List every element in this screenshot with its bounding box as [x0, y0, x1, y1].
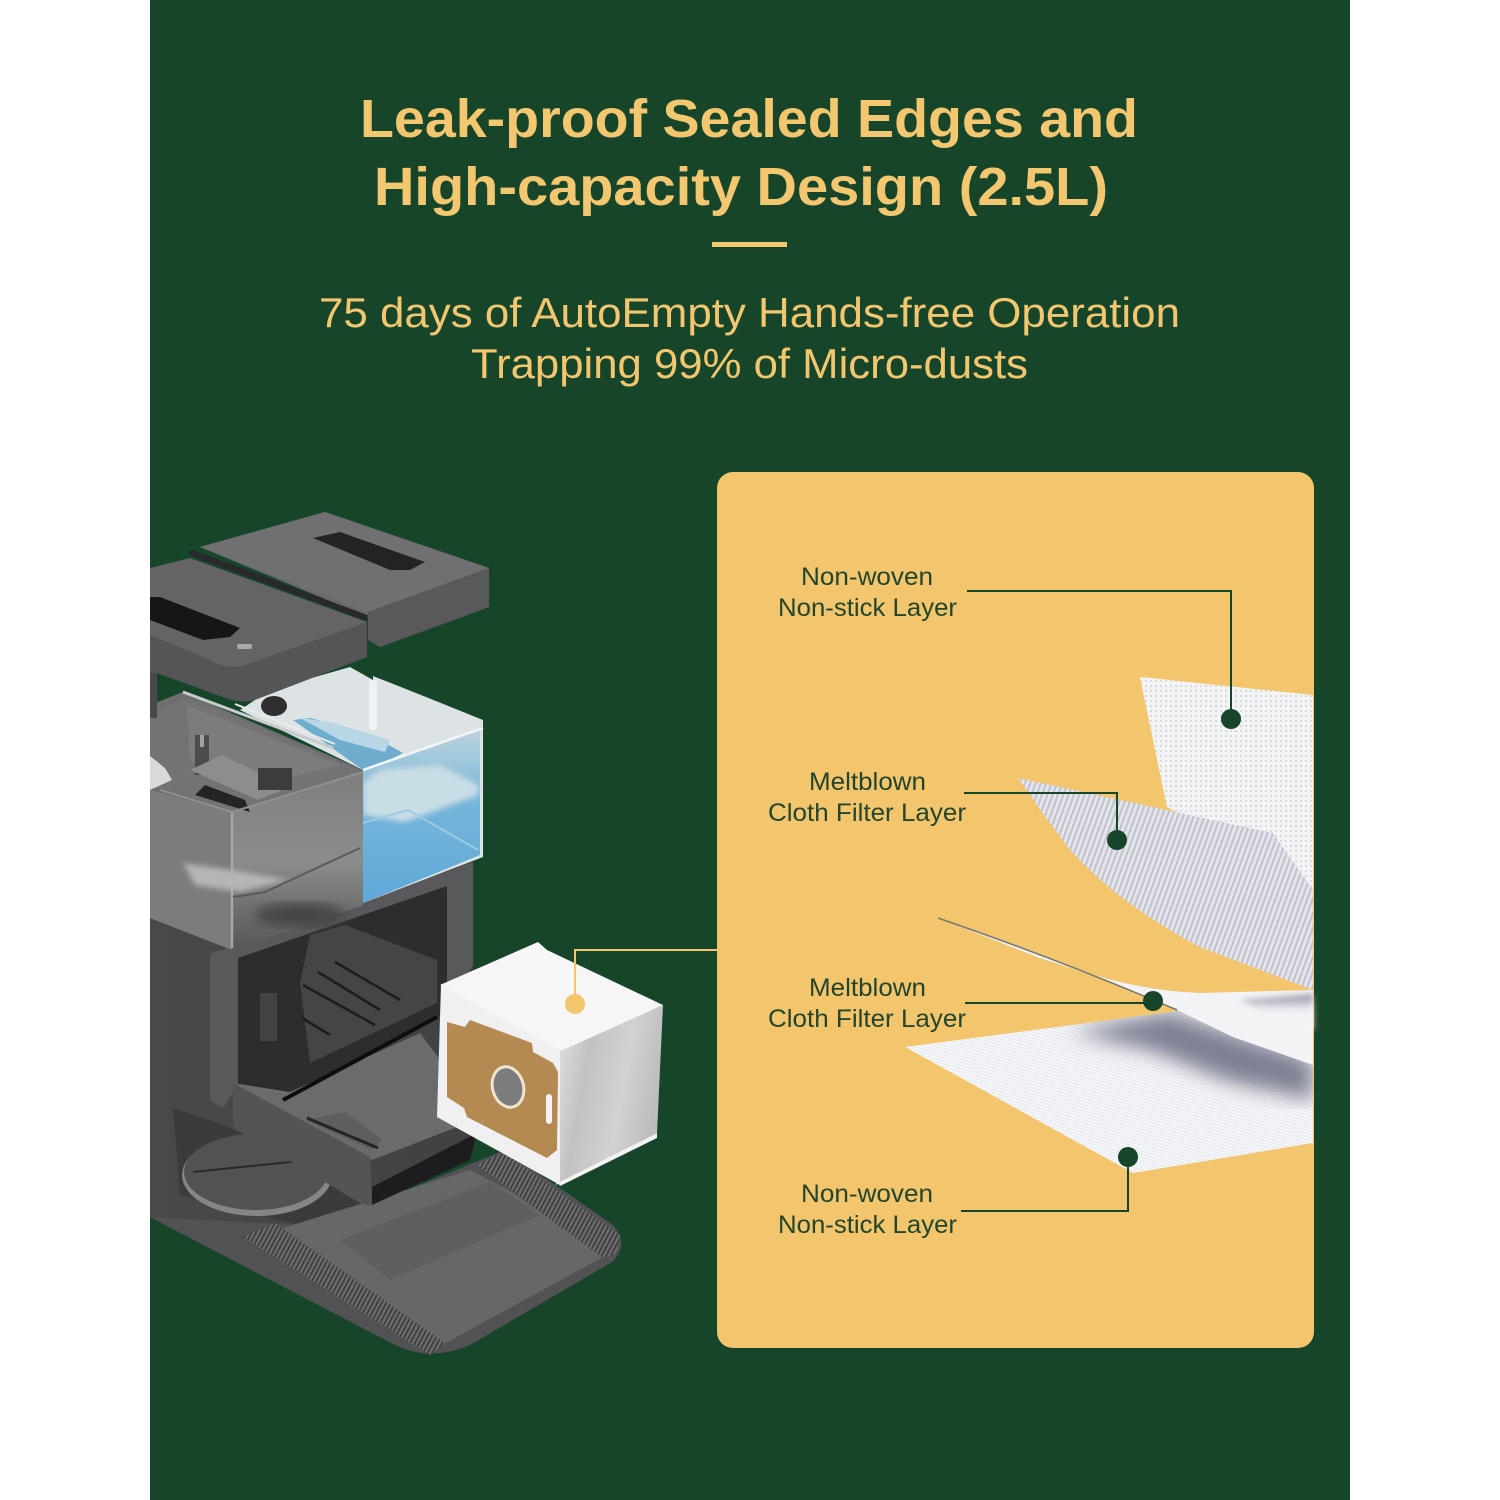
illustration: base station — [150, 512, 663, 1355]
panel: filter layers — [717, 472, 1314, 1348]
lid — [150, 512, 489, 702]
label: meltblown filter layer lower: Meltblown — [809, 974, 926, 1002]
callout: dust bag connector — [565, 950, 717, 1014]
label: non-woven non-stick layer top: Non-stick Layer — [778, 594, 957, 622]
sheet 2 — [1018, 778, 1313, 990]
dust tank mechanism — [190, 735, 292, 812]
leader: bottom non-woven — [961, 1147, 1138, 1211]
label: meltblown filter layer lower — [768, 974, 966, 1033]
subtitle — [319, 289, 1180, 387]
label: meltblown filter layer upper — [768, 768, 966, 827]
infographic canvas — [150, 0, 1350, 1500]
leader: upper meltblown — [964, 793, 1127, 850]
subtitle: Trapping 99% of Micro-dusts — [471, 340, 1028, 387]
station body — [150, 858, 473, 1345]
title underline — [712, 242, 787, 247]
turntable disk — [182, 1134, 332, 1216]
lid right handle — [313, 532, 425, 570]
leader: lower meltblown — [965, 991, 1163, 1011]
lid indicator — [237, 644, 252, 649]
label: meltblown filter layer upper: Cloth Filter Layer — [768, 799, 966, 827]
sheet 3 — [938, 918, 1313, 1065]
lid right section — [200, 512, 489, 647]
station column frame — [210, 862, 473, 1108]
label: non-woven non-stick layer bottom: Non-stick Layer — [778, 1211, 957, 1239]
lid left handle — [150, 597, 240, 640]
bag plate hole — [486, 1061, 530, 1113]
station base recess — [173, 1108, 380, 1225]
subtitle: 75 days of AutoEmpty Hands-free Operation — [319, 289, 1180, 336]
station cavity — [238, 886, 447, 1102]
title — [360, 89, 1138, 217]
dust tank — [150, 692, 363, 950]
label: meltblown filter layer upper: Meltblown — [809, 768, 926, 796]
leader: top non-woven — [967, 591, 1241, 729]
wash mat — [150, 1150, 621, 1355]
label: non-woven non-stick layer bottom: Non-woven — [801, 1180, 933, 1208]
label: non-woven non-stick layer top: Non-woven — [801, 563, 933, 591]
lid groove — [190, 552, 367, 618]
bag top face — [440, 942, 663, 1050]
lid left section — [150, 560, 367, 702]
mat grille left — [243, 1223, 445, 1355]
mat grille right — [477, 1152, 620, 1258]
dust bag — [437, 942, 663, 1186]
clean water tank — [240, 667, 483, 903]
label: non-woven non-stick layer bottom — [778, 1180, 957, 1239]
bag front face — [437, 985, 560, 1185]
sheet 4 — [905, 1000, 1313, 1173]
green background panel — [150, 0, 1350, 1500]
label: non-woven non-stick layer top — [778, 563, 957, 622]
title: Leak-proof Sealed Edges and — [360, 89, 1138, 149]
label: meltblown filter layer lower: Cloth Filter Layer — [768, 1005, 966, 1033]
bag right face — [556, 1005, 663, 1185]
sheet 1 — [1140, 677, 1313, 890]
title: High-capacity Design (2.5L) — [374, 157, 1108, 217]
pull-out drawer — [233, 1017, 483, 1206]
bag cardboard plate — [447, 1020, 558, 1158]
illustration: filter sheets — [905, 677, 1313, 1173]
